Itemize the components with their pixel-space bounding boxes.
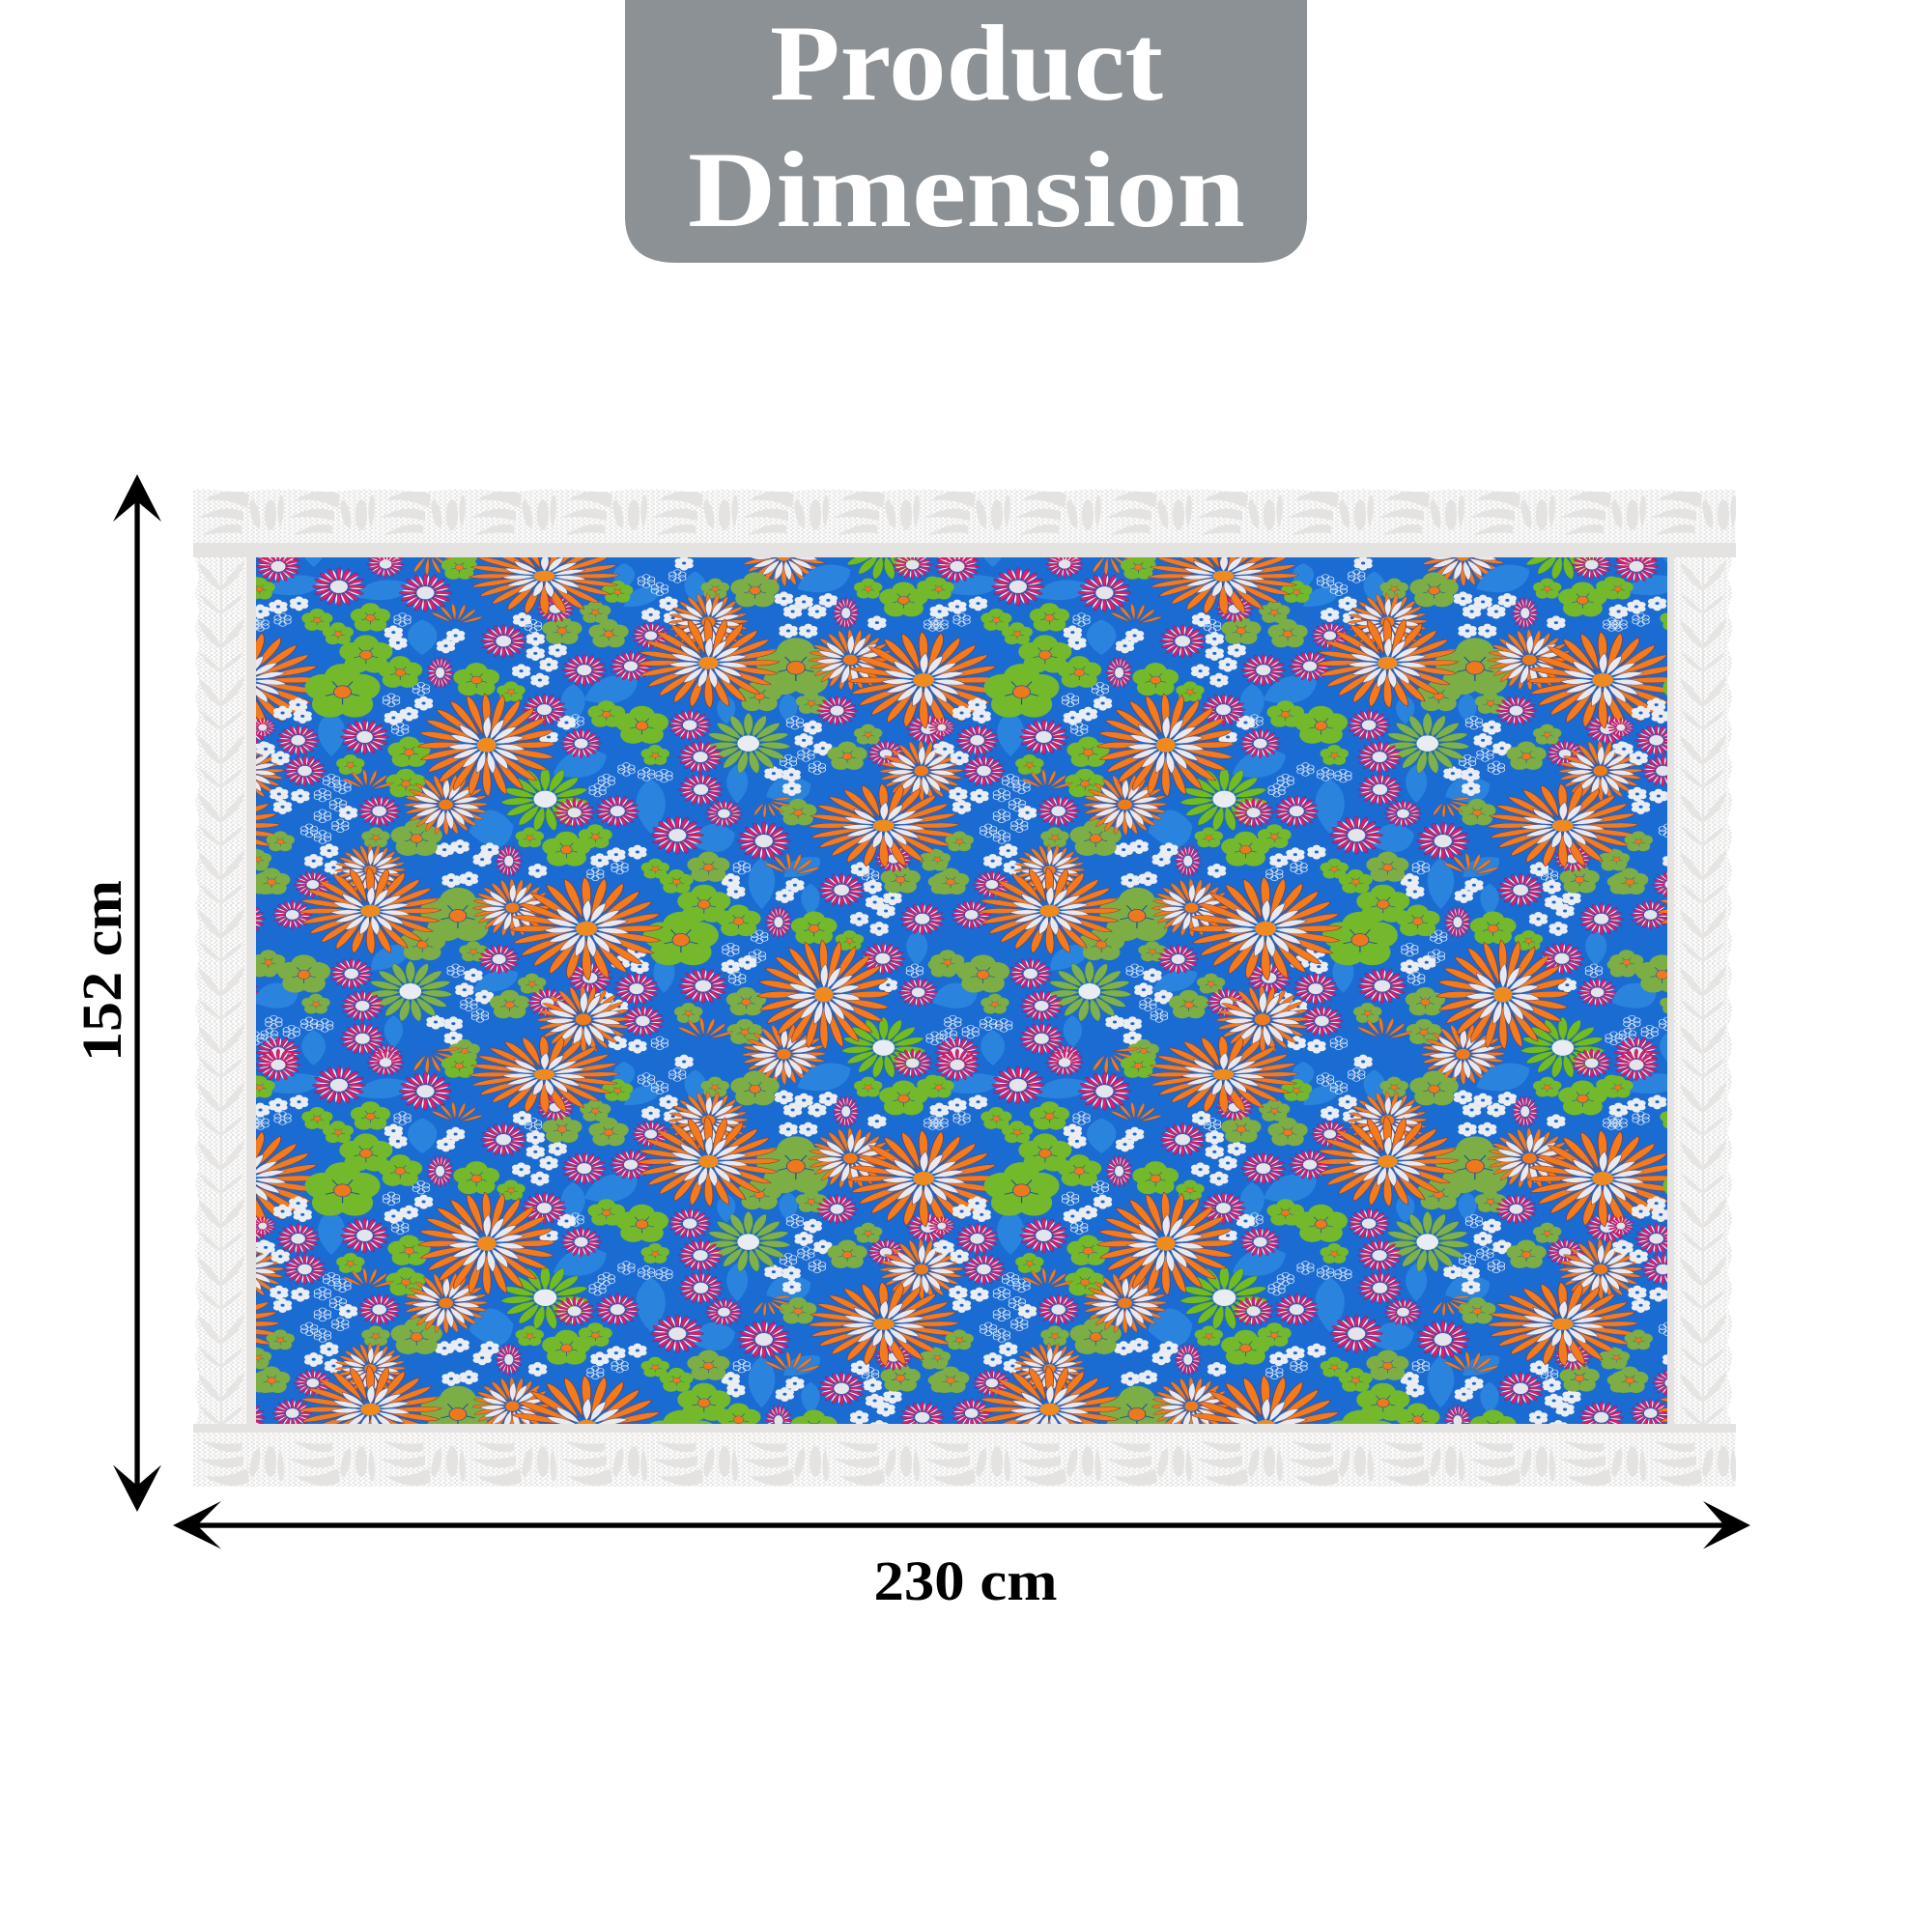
lace border: right (1667, 556, 1734, 1424)
width label: 230 cm (873, 1549, 1057, 1612)
title panel (625, 0, 1307, 263)
height arrow (113, 474, 161, 1512)
title panel: Product (770, 4, 1163, 124)
title panel: Dimension (688, 130, 1245, 250)
lace border: bottom (193, 1424, 1736, 1487)
floral fabric (256, 557, 1667, 1424)
width arrow (173, 1501, 1750, 1549)
height label: 152 cm (71, 880, 133, 1062)
tablecloth product (193, 489, 1736, 1487)
lace border: left (193, 556, 256, 1424)
lace border: top (193, 488, 1736, 557)
